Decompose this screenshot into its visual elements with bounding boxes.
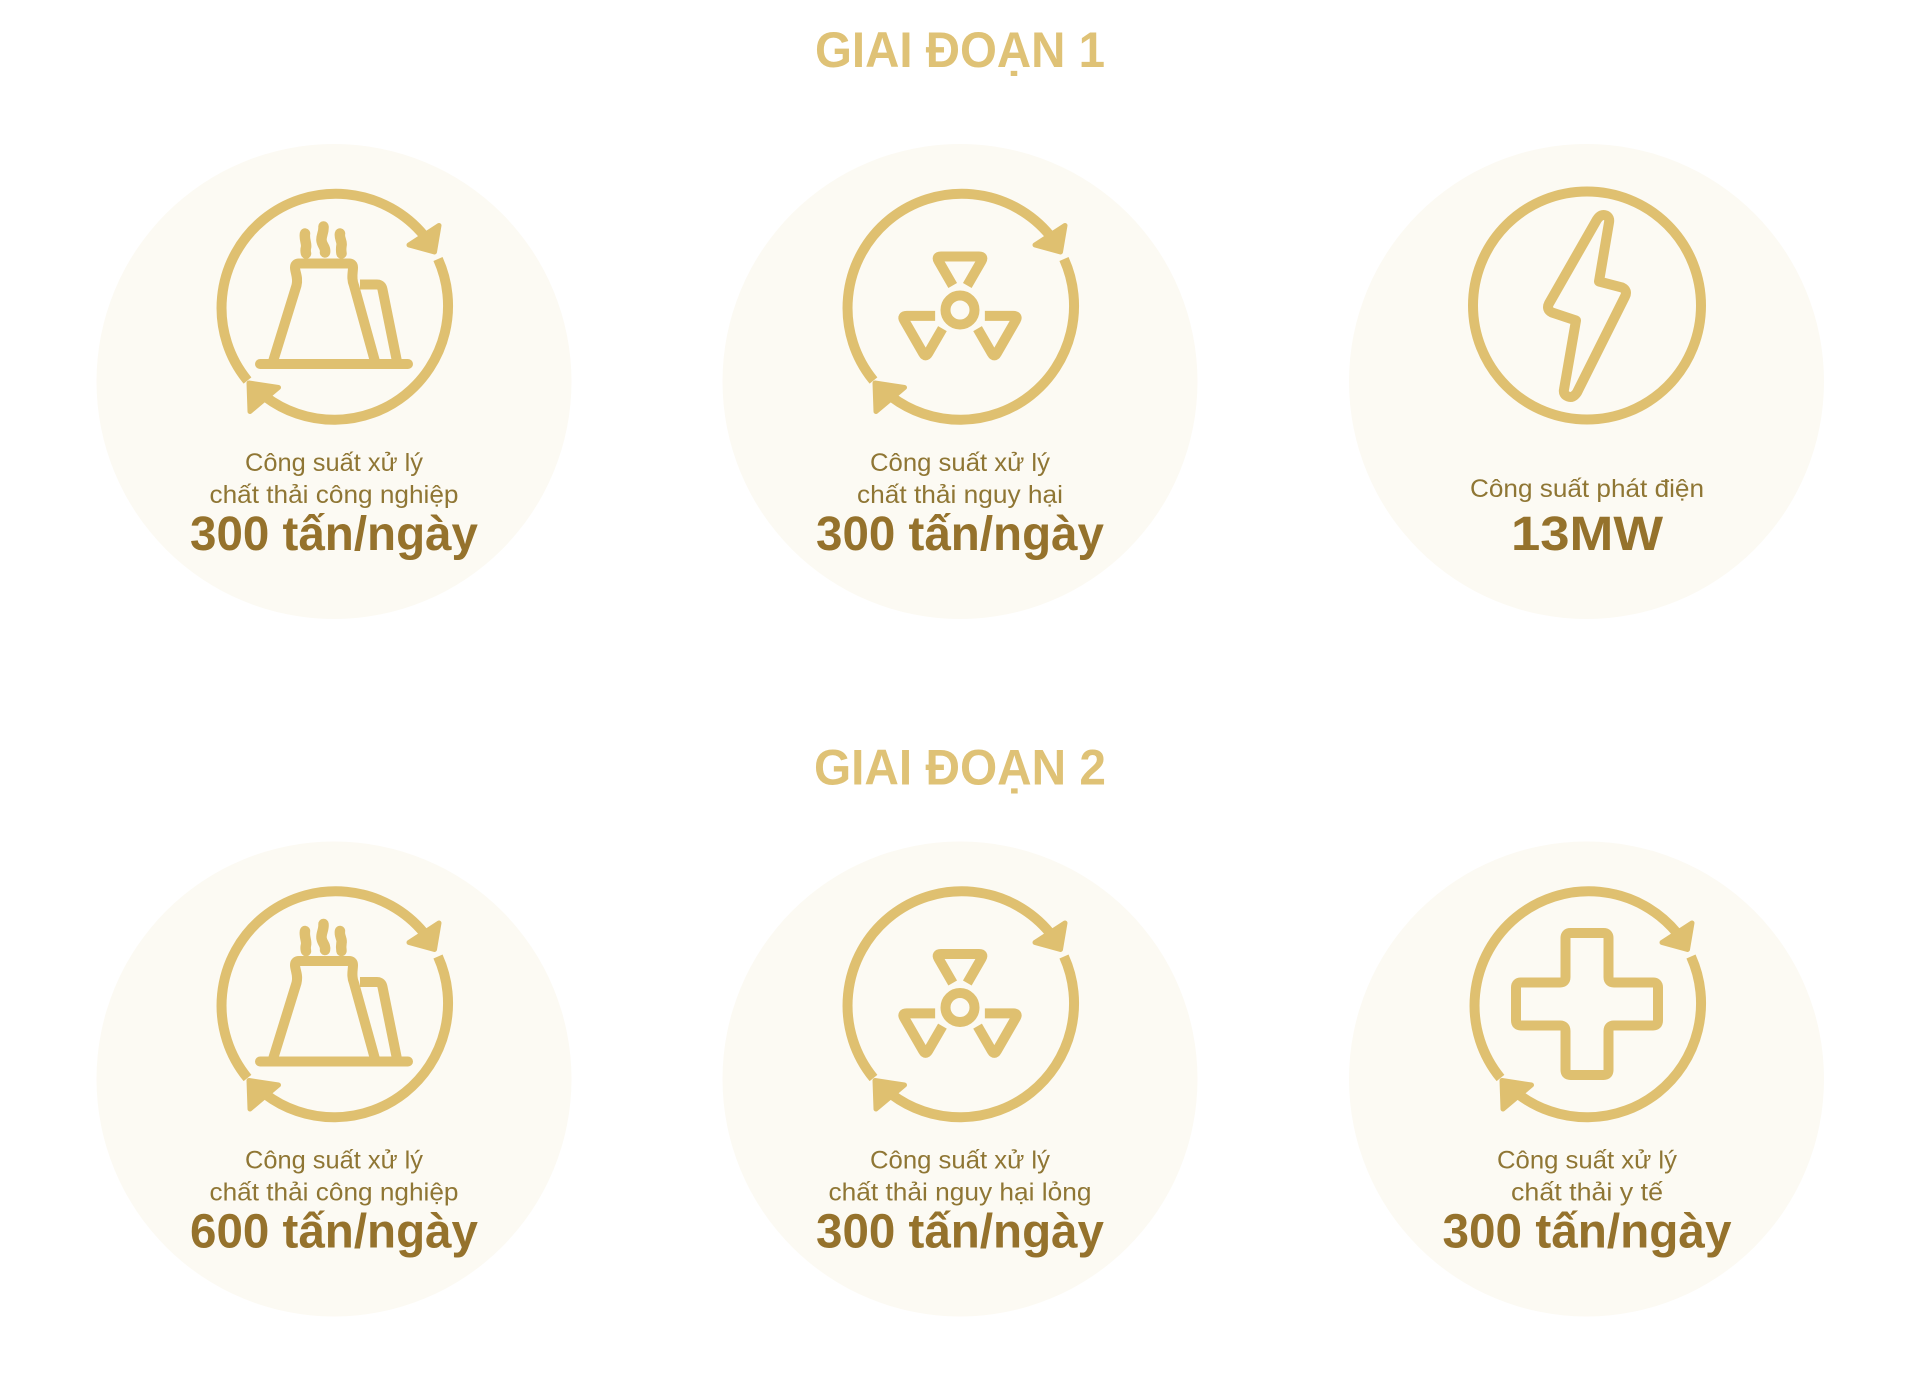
- text: stage 2 industrial waste label and value: Công suất xử lý: [245, 1146, 423, 1174]
- text: stage 1 power generation label and value: 13MW: [1511, 508, 1664, 561]
- text: stage 1 hazardous waste label and value: Công suất xử lý: [870, 449, 1051, 477]
- text: stage 1 industrial waste label and value: [190, 449, 478, 561]
- icon: radiation symbol with recycling arrows: [848, 891, 1074, 1117]
- title: GIAI ĐOẠN 1: GIAI ĐOẠN 1: [815, 22, 1105, 78]
- text: stage 2 liquid hazardous waste label and value: Công suất xử lý: [870, 1146, 1051, 1174]
- text: stage 2 liquid hazardous waste label and value: 300 tấn/ngày: [816, 1206, 1104, 1258]
- text: stage 1 power generation label and value: [1470, 475, 1704, 561]
- panel: stage 1 power generation: [1349, 144, 1824, 619]
- text: stage 2 medical waste label and value: chất thải y tế: [1511, 1178, 1663, 1206]
- icon: power plant with recycling arrows: [222, 891, 448, 1117]
- panel: stage 1 industrial waste: [96, 144, 572, 619]
- panel: stage 2 medical waste: [1349, 842, 1824, 1316]
- text: stage 1 hazardous waste label and value: 300 tấn/ngày: [816, 508, 1104, 561]
- panel: stage 2 liquid hazardous waste: [722, 842, 1198, 1316]
- text: stage 1 hazardous waste label and value: chất thải nguy hại: [857, 481, 1063, 509]
- text: stage 1 hazardous waste label and value: [816, 449, 1104, 561]
- text: stage 1 industrial waste label and value: Công suất xử lý: [245, 449, 423, 477]
- text: stage 2 industrial waste label and value: 600 tấn/ngày: [190, 1206, 478, 1258]
- text: stage 2 medical waste label and value: Công suất xử lý: [1497, 1146, 1678, 1174]
- text: stage 2 industrial waste label and value: chất thải công nghiệp: [210, 1178, 458, 1206]
- text: stage 1 industrial waste label and value: chất thải công nghiệp: [210, 481, 458, 509]
- icon: radiation symbol with recycling arrows: [848, 194, 1074, 420]
- icon: medical cross with recycling arrows: [1475, 891, 1701, 1117]
- title: GIAI ĐOẠN 2: GIAI ĐOẠN 2: [814, 740, 1106, 796]
- icon: lightning bolt in circle: [1473, 192, 1701, 420]
- icon: power plant with recycling arrows: [222, 194, 448, 420]
- panel: stage 1 hazardous waste: [722, 144, 1198, 619]
- panel: stage 2 industrial waste: [96, 842, 572, 1316]
- text: stage 2 liquid hazardous waste label and value: [816, 1146, 1104, 1258]
- text: stage 2 industrial waste label and value: [190, 1146, 478, 1258]
- text: stage 2 medical waste label and value: [1442, 1146, 1732, 1258]
- text: stage 1 power generation label and value: Công suất phát điện: [1470, 475, 1704, 503]
- text: stage 2 liquid hazardous waste label and value: chất thải nguy hại lỏng: [828, 1178, 1092, 1206]
- text: stage 2 medical waste label and value: 300 tấn/ngày: [1442, 1206, 1732, 1258]
- text: stage 1 industrial waste label and value: 300 tấn/ngày: [190, 508, 478, 561]
